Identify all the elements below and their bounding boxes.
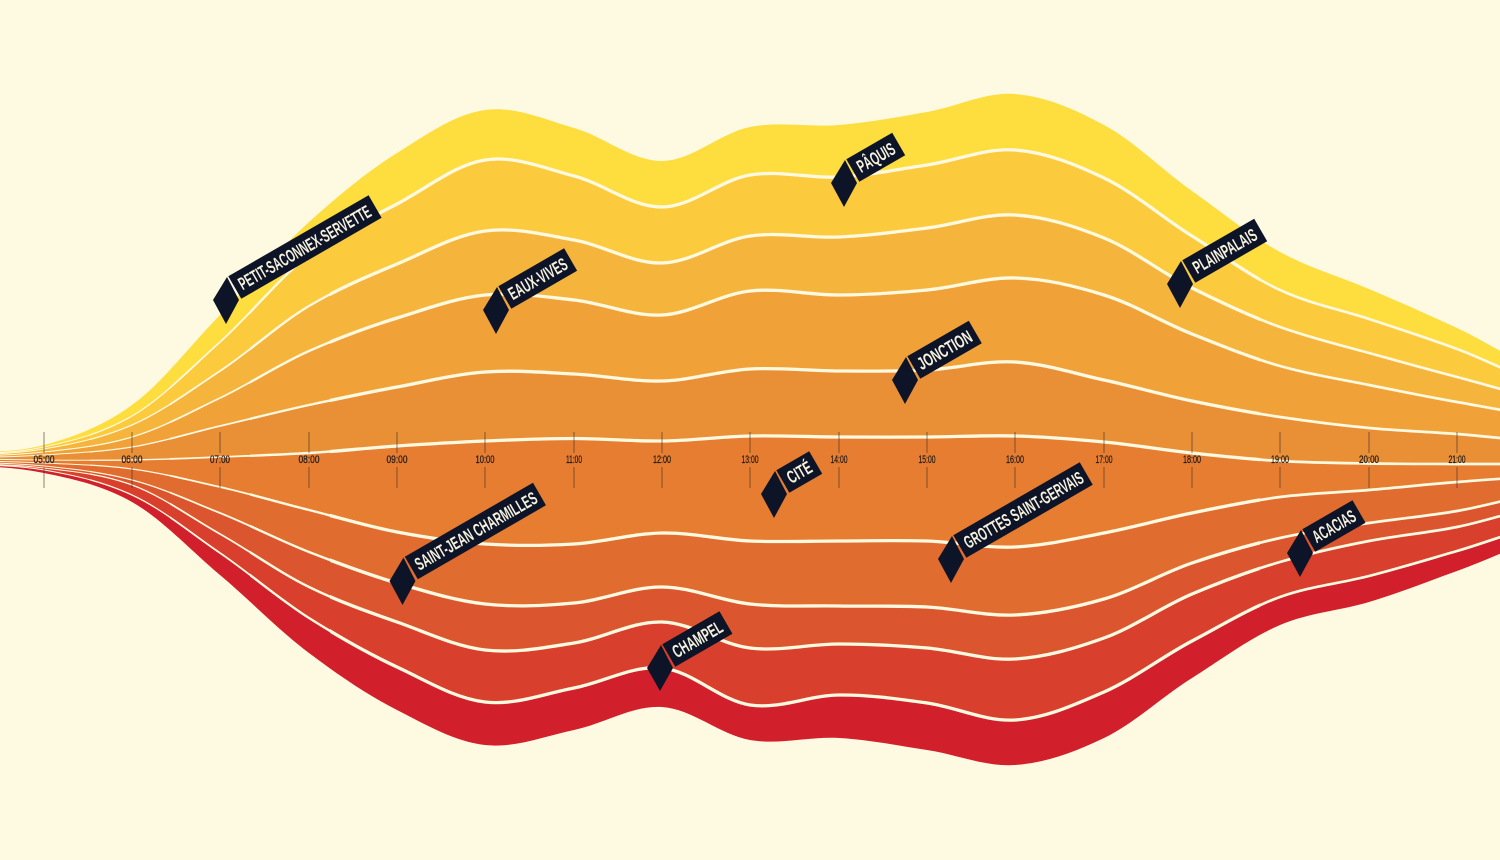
hour labels: 06:00: [122, 454, 142, 466]
label: Pâquis: PÂQUIS: [853, 138, 899, 177]
hour labels: 19:00: [1271, 454, 1289, 466]
label: Plainpalais: [1167, 219, 1267, 308]
label: Petit-Saconnex-Servette: [213, 195, 382, 324]
time axis: [34, 432, 1466, 488]
hour labels: 10:00: [476, 454, 494, 466]
label: Saint-Jean Charmilles: [390, 483, 546, 605]
hour labels: 12:00: [653, 454, 671, 466]
hour labels: 05:00: [34, 454, 54, 466]
hour labels: 14:00: [830, 454, 848, 466]
hour labels: 13:00: [742, 454, 758, 466]
label: Grottes Saint-Gervais: GROTTES SAINT-GERVAIS: [960, 468, 1087, 553]
label: Petit-Saconnex-Servette: PETIT-SACONNEX-SERVETTE: [235, 202, 375, 294]
label: Champel: CHAMPEL: [669, 617, 726, 662]
neighbourhood ribbon labels: [213, 133, 1366, 691]
label: Eaux-Vives: [483, 248, 577, 334]
label: Saint-Jean Charmilles: SAINT-JEAN CHARMILLES: [411, 488, 541, 574]
hour labels: 16:00: [1006, 454, 1024, 466]
label: Acacias: ACACIAS: [1309, 506, 1360, 547]
hour labels: 11:00: [566, 454, 582, 466]
label: Grottes Saint-Gervais: [938, 462, 1093, 583]
label: Cité: [761, 451, 822, 518]
hour labels: 20:00: [1359, 454, 1379, 466]
label: Champel: [647, 611, 732, 691]
hour labels: 07:00: [210, 454, 230, 466]
label: Jonction: [892, 321, 982, 404]
hour labels: [34, 454, 1466, 466]
label: Pâquis: [831, 133, 905, 207]
label: Plainpalais: PLAINPALAIS: [1189, 225, 1261, 278]
hour labels: 15:00: [918, 454, 936, 466]
label: Cité: CITÉ: [783, 456, 816, 488]
label: Acacias: [1287, 500, 1366, 577]
hour labels: 18:00: [1183, 454, 1201, 466]
stream boundary lines: [0, 148, 1500, 722]
axis tick marks: [44, 432, 1457, 488]
hour labels: 17:00: [1096, 454, 1112, 466]
infographic: neighbourhood streamgraph: [0, 94, 1500, 766]
hour labels: 09:00: [386, 454, 408, 466]
label: Eaux-Vives: EAUX-VIVES: [505, 254, 571, 304]
hour labels: 08:00: [298, 454, 320, 466]
label: Jonction: JONCTION: [914, 327, 976, 374]
hour labels: 21:00: [1448, 454, 1466, 466]
